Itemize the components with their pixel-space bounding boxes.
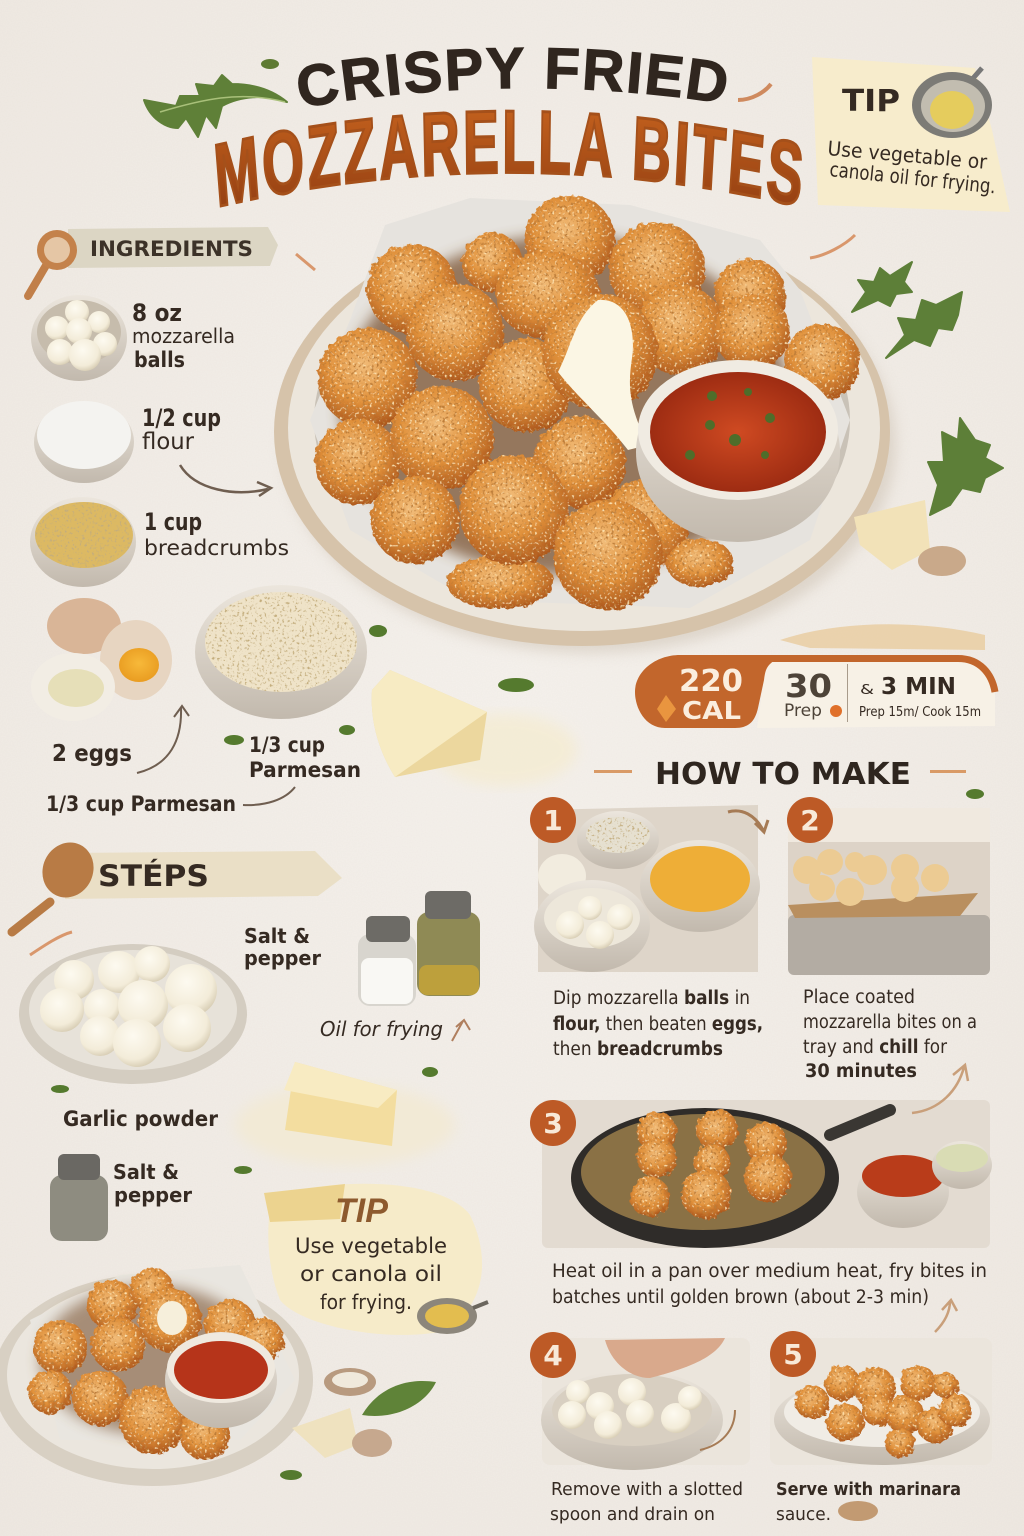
arrow from parmesan	[243, 787, 295, 805]
ingredient: flour: flour	[142, 429, 195, 455]
step 2: 30 minutes	[805, 1061, 917, 1082]
label: salt and pepper top: Salt &	[244, 924, 310, 948]
bowl	[31, 295, 127, 381]
label: salt and pepper bottom: Salt &	[113, 1160, 179, 1184]
step 5: sauce.	[776, 1505, 831, 1525]
badge 2: 2	[800, 804, 820, 837]
label: salt and pepper top	[244, 924, 321, 970]
badge 1: 1	[543, 804, 563, 837]
tip note top right: TIP	[842, 84, 900, 119]
step 2: tray and chill for	[803, 1037, 947, 1058]
ingredient: mozzarella: mozzarella	[132, 324, 235, 348]
badge 4	[530, 1332, 576, 1378]
stats bar	[635, 655, 995, 728]
cheese block and gratings	[235, 1062, 455, 1165]
how to make heading	[594, 757, 966, 792]
photo	[788, 808, 990, 975]
icon: garlic clove	[838, 1501, 878, 1521]
stats bar: Prep 15m/ Cook 15m	[859, 705, 981, 720]
stats bar: Prep	[784, 701, 822, 721]
dip bowl	[636, 360, 840, 542]
badge 2	[787, 797, 833, 843]
step 3: Heat oil in a pan over medium heat, fry bites in	[552, 1261, 987, 1282]
how to make heading: HOW TO MAKE	[655, 757, 911, 792]
step 2: mozzarella bites on a	[803, 1012, 977, 1033]
ingredient: mozzarella: 8 oz	[132, 299, 182, 327]
plate of raw mozzarella	[19, 944, 247, 1084]
hand	[605, 1338, 725, 1378]
step 1	[530, 797, 768, 1060]
bowl	[30, 497, 136, 587]
stats bar: &	[860, 683, 874, 698]
melted cheese	[558, 300, 648, 450]
arrow to plate	[180, 465, 271, 496]
herb flecks	[51, 625, 984, 1480]
step 1: Dip mozzarella balls in	[553, 988, 750, 1009]
stats bar: 3 MIN	[881, 674, 956, 700]
ingredient: mozzarella	[31, 295, 235, 381]
tip note bottom: TIP	[335, 1192, 388, 1230]
main plate with bites	[274, 195, 896, 653]
badge 3	[530, 1100, 576, 1146]
step 5: Serve with marinara	[776, 1480, 961, 1500]
step 2: Place coated	[803, 987, 915, 1008]
label: salt and pepper bottom: pepper	[114, 1183, 192, 1207]
stats bar: 220	[679, 664, 743, 699]
ingredient: breadcrumbs: breadcrumbs	[144, 536, 289, 560]
photo	[534, 805, 768, 972]
label: salt and pepper bottom	[113, 1160, 192, 1207]
step 1: then breadcrumbs	[553, 1039, 723, 1060]
photo	[770, 1338, 992, 1465]
label: parmesan right	[249, 733, 361, 782]
small arrow	[452, 1020, 470, 1041]
photo	[542, 1100, 992, 1248]
step 2	[787, 797, 990, 1082]
grated cheese center	[433, 714, 577, 786]
steps heading	[12, 834, 342, 932]
tip note bottom: Use vegetable	[295, 1234, 447, 1258]
icon: flame	[657, 695, 676, 722]
shakers	[358, 891, 480, 1006]
badge 4: 4	[543, 1339, 563, 1372]
label: oil for frying: Oil for frying	[320, 1017, 443, 1041]
title: MOZZARELLA BITES	[214, 110, 802, 208]
step 5	[770, 1331, 992, 1525]
eggs	[31, 598, 172, 721]
parmesan wedge center	[372, 670, 487, 777]
ingredient: breadcrumbs: 1 cup	[144, 508, 202, 536]
badge 3: 3	[543, 1107, 563, 1140]
bottom plate with bites	[0, 1265, 313, 1486]
tip note top right	[812, 57, 1010, 212]
label: parmesan right: 1/3 cup	[249, 733, 325, 757]
icon: arugula leaf top	[144, 59, 287, 137]
ingredients heading	[28, 227, 278, 296]
step 3	[530, 1100, 992, 1308]
tip note bottom: or canola oil	[300, 1262, 442, 1286]
photo	[541, 1338, 750, 1470]
icon: small pan	[417, 1298, 488, 1334]
label: parmesan right: Parmesan	[249, 758, 361, 782]
tip note bottom: for frying.	[320, 1290, 412, 1314]
title: CRISPY FRIED	[298, 47, 726, 106]
label: parmesan left: 1/3 cup Parmesan	[46, 792, 236, 816]
dip bowl	[165, 1332, 277, 1428]
pepper shaker	[50, 1154, 108, 1241]
label: 2 eggs: 2 eggs	[52, 741, 132, 767]
ingredient: flour: 1/2 cup	[142, 404, 221, 432]
ingredient: flour	[34, 401, 221, 483]
icon: frying pan	[912, 68, 992, 138]
label: garlic powder: Garlic powder	[63, 1107, 219, 1131]
ingredient: mozzarella: balls	[134, 348, 185, 372]
steps heading: STÉPS	[98, 859, 209, 893]
paper liner	[310, 198, 850, 608]
fried bites	[315, 195, 860, 610]
ingredients heading: INGREDIENTS	[90, 237, 253, 261]
arrow from eggs	[137, 706, 189, 773]
label: salt and pepper top: pepper	[244, 946, 321, 970]
tip note top right: Use vegetable or	[827, 136, 989, 174]
accent stroke	[738, 84, 771, 100]
step 4: Remove with a slotted	[551, 1480, 743, 1500]
badge 5	[770, 1331, 816, 1377]
arrow step 3 to 5	[935, 1300, 957, 1332]
shadow under bites	[340, 235, 790, 575]
step 4: spoon and drain on	[550, 1505, 715, 1525]
bowl	[34, 401, 134, 483]
small garnish bottom	[292, 1368, 436, 1458]
icon: wooden spoon	[28, 230, 77, 296]
accent strokes	[30, 235, 855, 955]
panko bowl	[195, 585, 367, 719]
tip note bottom	[264, 1184, 488, 1335]
stats bar: CAL	[682, 696, 741, 725]
herb leaves right	[852, 262, 1003, 515]
ingredient: breadcrumbs	[30, 497, 289, 587]
title	[214, 47, 802, 208]
icon: dot	[830, 705, 842, 717]
step 1: flour, then beaten eggs,	[553, 1014, 763, 1035]
badge 1	[530, 797, 576, 843]
stats bar: 30	[785, 667, 832, 705]
icon: wooden spoon	[12, 834, 102, 932]
badge 5: 5	[783, 1338, 803, 1371]
crumbs accent under plate	[780, 624, 985, 650]
step 4	[530, 1332, 750, 1525]
parmesan wedge right	[854, 500, 966, 576]
step 3: batches until golden brown (about 2-3 min)	[552, 1287, 929, 1308]
arrow step 2 to 3	[912, 1065, 968, 1113]
